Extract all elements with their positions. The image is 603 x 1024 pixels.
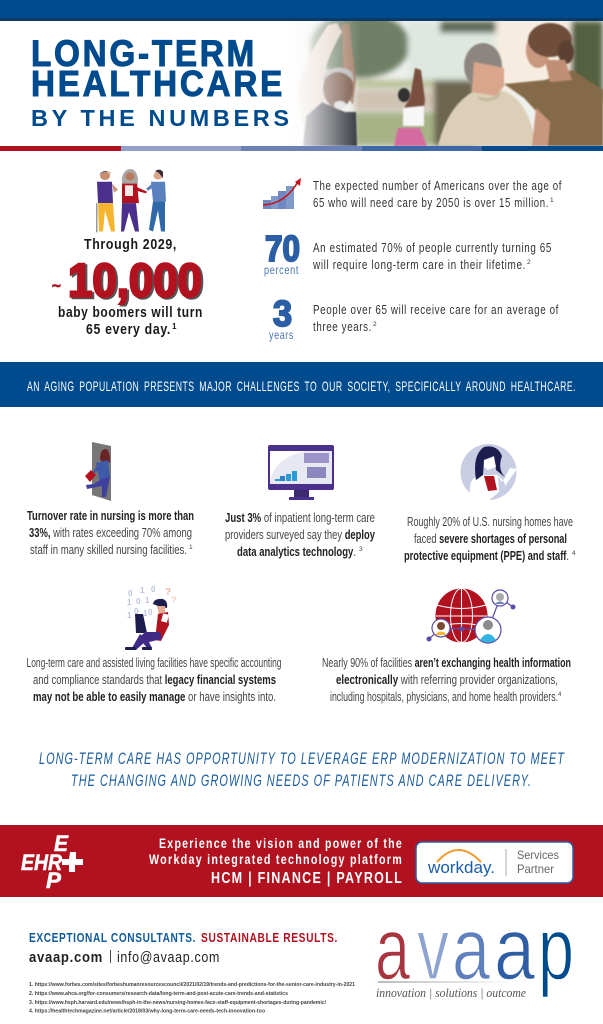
text: nearly 90% (322, 655, 571, 704)
text: roughly 20% (404, 514, 576, 563)
stat: 70 percent: will require long-term care in their lifetime. (312, 257, 526, 272)
logo: Workday services partner: Services (517, 848, 559, 862)
text: legacy financial systems: may not be able to easily manage or have insights into. (33, 689, 276, 704)
title (31, 33, 289, 131)
icon: nurse leaving through door (85, 442, 111, 501)
logo: Workday services partner (416, 842, 573, 883)
text: legacy financial systems: Long-term care and assisted living facilities have specific accounting (26, 655, 282, 670)
stat: through 2029, 10,000 boomers: 1 (172, 322, 177, 331)
younger woman (504, 70, 603, 146)
icon: three seniors (96, 169, 166, 232)
stat: through 2029, 10,000 boomers (52, 236, 204, 338)
panel: red Workday banner (0, 825, 603, 897)
tagline: EXCEPTIONAL CONSULTANTS. (29, 930, 196, 945)
tagline: SUSTAINABLE RESULTS. (201, 930, 338, 945)
stat: through 2029, 10,000 boomers: 65 every day. (86, 321, 171, 338)
stat: through 2029, 10,000 boomers: baby boomers will turn (58, 304, 203, 321)
icon: analytics monitor (268, 445, 334, 500)
banner: aging population (0, 362, 603, 407)
stat: 15 million (313, 178, 562, 210)
text: turnover rate (27, 508, 194, 557)
text: roughly 20%: 4 (572, 550, 576, 557)
big number: 10,000 (70, 255, 204, 308)
logo: avaap: v (417, 899, 449, 998)
stat: 3 years: 2 (373, 321, 377, 328)
text: turnover rate: Turnover rate in nursing is more than (27, 508, 194, 523)
banner copy (149, 836, 403, 887)
man (304, 22, 342, 122)
footnotes (29, 982, 355, 1014)
logo: Workday services partner: workday. (427, 859, 495, 877)
footnotes: 1. https://www.forbes.com/sites/forbeshumanresourcescouncil/2021/02/19/trends-and-predictions-for-the-senior-care-industry-in-2021 (29, 982, 355, 988)
icon: person at laptop with binary digits: 0 (136, 597, 141, 606)
icon: person at laptop with binary digits: 0 (148, 608, 153, 617)
title: HEALTHCARE (31, 63, 285, 104)
stat: 3 years: years (269, 328, 294, 342)
logo: EHR+ERP: P (46, 868, 61, 893)
logo: avaap: a (375, 899, 410, 998)
header photo: seniors exercising and with caregiver (299, 21, 603, 146)
text: turnover rate: staff in many skilled nursing facilities. (30, 542, 187, 557)
logo tagline: innovation | solutions | outcome (376, 985, 526, 1000)
icon: person at laptop with binary digits: 0 (151, 585, 156, 594)
text: just 3%: data analytics technology. (237, 544, 356, 559)
stat: 70 percent: percent (264, 263, 299, 277)
icon: person at laptop with binary digits: 1 (140, 586, 145, 595)
logo: EHR+ERP (21, 831, 83, 893)
text: nearly 90%: 4 (558, 692, 562, 698)
stat: through 2029, 10,000 boomers: Through 2029, (84, 236, 177, 253)
stat: 70 percent: 70 (265, 228, 300, 269)
stat: 70 percent: 2 (527, 259, 531, 266)
stat: 3 years (269, 293, 559, 342)
icon: person at laptop with binary digits (125, 585, 176, 650)
text: legacy financial systems (26, 655, 282, 704)
text: just 3% (225, 510, 376, 559)
logo: Workday services partner: Partner (517, 862, 554, 876)
text: just 3%: Just 3% of inpatient long-term care (225, 510, 375, 525)
contact line: avaap.com (29, 949, 103, 966)
banner copy: Workday integrated technology platform (149, 852, 403, 867)
icon: rising bar chart (263, 178, 301, 209)
icon: person at laptop with binary digits: 0 (128, 589, 133, 598)
big number: 10,000 (68, 254, 202, 306)
logo: avaap: p (538, 899, 574, 998)
callout: ERP modernization opportunity (39, 749, 565, 790)
logo: EHR+ERP: E (54, 831, 69, 856)
banner copy: HCM | FINANCE | PAYROLL (211, 870, 403, 887)
top bar (0, 0, 603, 21)
tagline (29, 930, 338, 945)
stat: 3 years: 3 (273, 293, 292, 334)
title: BY THE NUMBERS (31, 105, 289, 131)
yoga woman (404, 68, 425, 108)
icon: globe with connected people (426, 588, 516, 643)
text: just 3%: providers surveyed say they deploy (225, 527, 376, 542)
footnotes: 3. https://www.hsph.harvard.edu/news/hsph-in-the-news/nursing-homes-face-staff-equipment-shortages-during-pandemic/ (29, 1000, 326, 1006)
contact line: info@avaap.com (117, 949, 220, 966)
icon: person at laptop with binary digits: 1 (143, 609, 148, 618)
icon: person at laptop with binary digits: ? (165, 587, 171, 598)
stat: 3 years: three years. (313, 319, 372, 334)
icon: person at laptop with binary digits: 1 (145, 596, 150, 605)
icon: person at laptop with binary digits: 0 (134, 607, 139, 616)
icon: person at laptop with binary digits: 1 (127, 611, 132, 620)
stat: 70 percent (264, 228, 552, 277)
text: legacy financial systems: and compliance standards that legacy financial systems (33, 672, 276, 687)
color stripe (0, 146, 603, 151)
contact line (29, 949, 220, 966)
big number: ~ (52, 278, 61, 295)
elder woman (438, 88, 536, 146)
text: just 3%: 3 (359, 546, 363, 553)
text: turnover rate: 1 (189, 544, 193, 551)
text: turnover rate: 33%, with rates exceeding 70% among (29, 525, 192, 540)
title: LONG-TERM (31, 33, 257, 74)
icon: doctor in mask (460, 444, 517, 501)
banner copy: Experience the vision and power of the (159, 836, 403, 851)
icon: person at laptop with binary digits: ? (171, 595, 176, 605)
stat: 15 million: 1 (550, 197, 554, 204)
logo: avaap: a (494, 899, 535, 998)
icon: person at laptop with binary digits: 1 (127, 598, 132, 607)
logo: avaap: a (452, 899, 490, 998)
logo: EHR+ERP: EHR (21, 850, 62, 875)
footnotes: 2. https://www.ahca.org/for-consumers/research-data/long-term-and-post-acute-care-trends-and-statistics (29, 991, 288, 997)
footnotes: 4. https://healthtechmagazine.net/article/2018/03/why-long-term-care-needs-tech-innovation-too (29, 1008, 266, 1014)
logo: avaap (375, 899, 574, 998)
